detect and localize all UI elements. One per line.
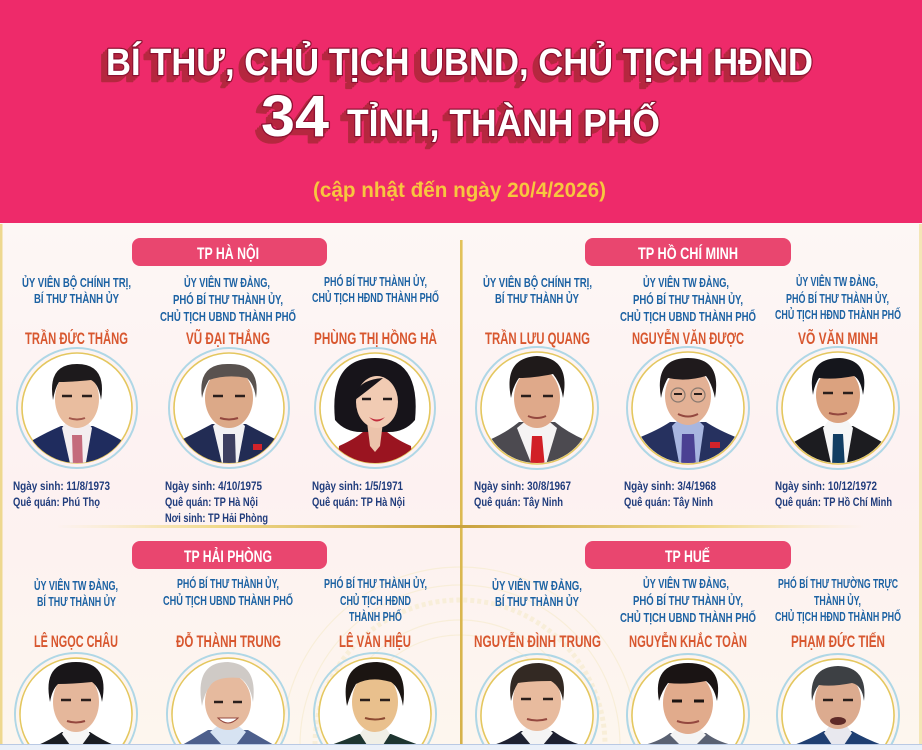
person: Phùng Thị Hồng Hà: Ngày sinh: 1/5/1971 — [312, 479, 403, 493]
title: TỈNH, THÀNH PHỐ — [347, 100, 660, 145]
person: Võ Văn Minh: ỦY VIÊN TW ĐẢNG, — [796, 274, 878, 289]
person: Võ Văn Minh: Quê quán: TP Hồ Chí Minh — [775, 495, 892, 509]
city label: TP Hải Phòng — [132, 541, 327, 569]
person: Trần Lưu Quang: Ngày sinh: 30/8/1967 — [474, 479, 571, 493]
person: Lê Ngọc Châu — [15, 578, 137, 745]
person: Trần Đức Thắng: Ngày sinh: 11/8/1973 — [13, 479, 110, 493]
city label: TP Hải Phòng: TP HẢI PHÒNG — [184, 547, 272, 566]
person: Phùng Thị Hồng Hà: PHÙNG THỊ HỒNG HÀ — [314, 329, 437, 348]
person: Vũ Đại Thắng: Ngày sinh: 4/10/1975 — [165, 479, 262, 493]
person: Nguyễn Khắc Toàn: CHỦ TỊCH UBND THÀNH PHỐ — [620, 610, 756, 625]
person: Võ Văn Minh: Ngày sinh: 10/12/1972 — [775, 479, 877, 493]
person: Nguyễn Đình Trung: ỦY VIÊN TW ĐẢNG, — [492, 578, 582, 593]
person: Nguyễn Văn Được: ỦY VIÊN TW ĐẢNG, — [643, 275, 729, 290]
person: Lê Ngọc Châu: BÍ THƯ THÀNH ỦY — [37, 594, 116, 609]
person: Phùng Thị Hồng Hà: CHỦ TỊCH HĐND THÀNH PHỐ — [312, 290, 439, 305]
person: Vũ Đại Thắng: ỦY VIÊN TW ĐẢNG, — [184, 275, 270, 290]
person: Lê Ngọc Châu: LÊ NGỌC CHÂU — [34, 632, 118, 651]
person: Đỗ Thành Trung: CHỦ TỊCH UBND THÀNH PHỐ — [163, 593, 293, 608]
person: Lê Văn Hiệu — [314, 576, 436, 745]
city label: TP Hà Nội — [132, 238, 327, 266]
person: Võ Văn Minh — [775, 274, 901, 509]
person: Nguyễn Đình Trung — [474, 578, 601, 745]
person: Nguyễn Văn Được: CHỦ TỊCH UBND THÀNH PHỐ — [620, 309, 756, 324]
person: Đỗ Thành Trung: ĐỖ THÀNH TRUNG — [176, 632, 281, 651]
person: Trần Đức Thắng: ỦY VIÊN BỘ CHÍNH TRỊ, — [22, 275, 131, 290]
person: Lê Văn Hiệu: CHỦ TỊCH HĐND — [340, 593, 411, 608]
person: Nguyễn Đình Trung: BÍ THƯ THÀNH ỦY — [495, 594, 579, 609]
person: Đỗ Thành Trung — [163, 576, 293, 745]
city label: TP Hồ Chí Minh: TP HỒ CHÍ MINH — [638, 244, 738, 263]
person: Phạm Đức Tiến — [775, 576, 901, 745]
person: Trần Lưu Quang — [474, 275, 598, 509]
person: Nguyễn Văn Được: NGUYỄN VĂN ĐƯỢC — [632, 329, 744, 348]
title — [106, 40, 813, 149]
person: Lê Văn Hiệu: THÀNH PHỐ — [349, 609, 402, 624]
panel: TP Huế — [474, 541, 901, 745]
title: BÍ THƯ, CHỦ TỊCH UBND, CHỦ TỊCH HĐND — [106, 40, 813, 84]
content background — [0, 222, 922, 750]
person: Vũ Đại Thắng: Quê quán: TP Hà Nội — [165, 495, 258, 509]
person: Nguyễn Khắc Toàn: ỦY VIÊN TW ĐẢNG, — [643, 576, 729, 591]
person: Phùng Thị Hồng Hà: Quê quán: TP Hà Nội — [312, 495, 405, 509]
subtitle: update date: (cập nhật đến ngày 20/4/2026) — [313, 179, 606, 202]
person: Trần Đức Thắng: Quê quán: Phú Thọ — [13, 495, 100, 509]
person: Lê Văn Hiệu: PHÓ BÍ THƯ THÀNH ỦY, — [324, 576, 427, 591]
person: Nguyễn Văn Được: PHÓ BÍ THƯ THÀNH ỦY, — [633, 292, 743, 307]
person: Võ Văn Minh: VÕ VĂN MINH — [798, 328, 878, 348]
person: Đỗ Thành Trung: PHÓ BÍ THƯ THÀNH ỦY, — [177, 576, 279, 591]
person: Nguyễn Khắc Toàn: NGUYỄN KHẮC TOÀN — [629, 632, 747, 651]
city label: TP Hồ Chí Minh — [585, 238, 791, 266]
panel: TP Hải Phòng — [15, 541, 436, 745]
panel: TP Hà Nội — [13, 238, 439, 525]
person: Trần Lưu Quang: ỦY VIÊN BỘ CHÍNH TRỊ, — [483, 275, 592, 290]
person: Phùng Thị Hồng Hà: PHÓ BÍ THƯ THÀNH ỦY, — [324, 274, 427, 289]
panel: TP Hồ Chí Minh — [474, 238, 901, 509]
person: Vũ Đại Thắng: VŨ ĐẠI THẮNG — [186, 328, 270, 348]
person: Nguyễn Đình Trung: NGUYỄN ĐÌNH TRUNG — [474, 632, 601, 651]
person: Trần Đức Thắng: BÍ THƯ THÀNH ỦY — [34, 291, 119, 306]
person: Vũ Đại Thắng: CHỦ TỊCH UBND THÀNH PHỐ — [160, 309, 296, 324]
city label: TP Huế: TP HUẾ — [665, 547, 710, 566]
city label: TP Hà Nội: TP HÀ NỘI — [197, 244, 259, 263]
person: Nguyễn Khắc Toàn — [620, 576, 756, 745]
person: Phùng Thị Hồng Hà — [312, 274, 439, 509]
person: Nguyễn Văn Được — [620, 275, 756, 509]
person: Trần Lưu Quang: TRẦN LƯU QUANG — [485, 329, 590, 348]
person: Trần Đức Thắng: TRẦN ĐỨC THẮNG — [25, 329, 128, 348]
person: Lê Ngọc Châu: ỦY VIÊN TW ĐẢNG, — [34, 578, 118, 593]
person: Nguyễn Văn Được: Ngày sinh: 3/4/1968 — [624, 479, 716, 493]
person: Phạm Đức Tiến: THÀNH ỦY, — [814, 593, 861, 608]
person: Vũ Đại Thắng — [160, 275, 296, 525]
person: Vũ Đại Thắng: Nơi sinh: TP Hải Phòng — [165, 511, 268, 525]
person: Nguyễn Văn Được: Quê quán: Tây Ninh — [624, 495, 713, 509]
person: Nguyễn Khắc Toàn: PHÓ BÍ THƯ THÀNH ỦY, — [633, 593, 743, 608]
title: 34 — [261, 84, 329, 149]
city label: TP Huế — [585, 541, 791, 569]
person: Lê Văn Hiệu: LÊ VĂN HIỆU — [339, 632, 411, 651]
person: Trần Lưu Quang: BÍ THƯ THÀNH ỦY — [495, 291, 579, 306]
person: Trần Đức Thắng — [13, 275, 137, 509]
header band — [0, 0, 922, 223]
person: Vũ Đại Thắng: PHÓ BÍ THƯ THÀNH ỦY, — [173, 292, 283, 307]
person: Trần Lưu Quang: Quê quán: Tây Ninh — [474, 495, 563, 509]
